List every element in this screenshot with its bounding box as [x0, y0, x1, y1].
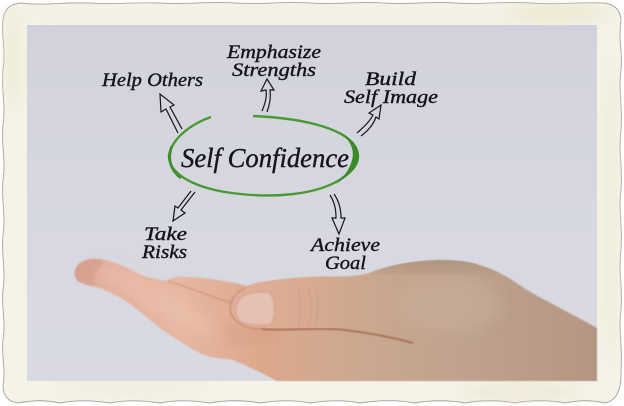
arrow: to emphasize strengths [261, 79, 274, 112]
wrist shadow along top of hand [373, 260, 492, 273]
diagram [101, 42, 438, 274]
label: build self image [344, 69, 438, 108]
thumb crease line [262, 329, 413, 343]
label: emphasize strengths: Strengths [232, 60, 316, 81]
label: emphasize strengths [226, 42, 321, 81]
label: achieve goal [309, 235, 380, 274]
thumb [230, 277, 360, 332]
thumb nail [236, 292, 274, 325]
arrow: to help others [160, 94, 182, 133]
central label: Self Confidence [181, 143, 349, 173]
index finger highlight [98, 268, 225, 340]
fingertip shadow [75, 259, 103, 286]
label: achieve goal: Achieve [309, 235, 380, 256]
thumb knuckle creases [298, 287, 318, 326]
label: take risks: Take [144, 224, 187, 245]
label: take risks: Risks [141, 242, 187, 263]
green ellipse [169, 116, 359, 195]
second finger edge [168, 281, 232, 303]
label: build self image: Build [365, 69, 417, 90]
arrow: to build self image [357, 105, 381, 136]
hand [75, 254, 597, 381]
label: build self image: Self Image [344, 87, 438, 108]
arrow: to take risks [173, 191, 195, 221]
label: help others: Help Others [101, 70, 203, 91]
arrow: to achieve goal [330, 194, 345, 234]
label: emphasize strengths: Emphasize [226, 42, 321, 63]
palm shadow [210, 327, 280, 343]
thumb tip edge [230, 288, 262, 329]
palm highlight [400, 277, 500, 333]
label: take risks [141, 224, 187, 263]
label: achieve goal: Goal [325, 253, 366, 274]
